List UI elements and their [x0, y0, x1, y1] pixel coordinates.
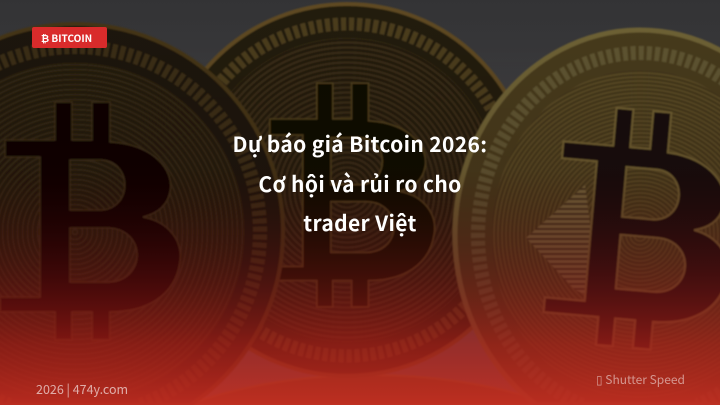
left coin	[0, 24, 283, 405]
title	[233, 129, 487, 238]
middle coin	[161, 4, 533, 376]
category badge	[32, 27, 107, 48]
bottom coin	[187, 375, 553, 405]
lit sunburst wedge	[526, 185, 600, 300]
photo credit: ▯ Shutter Speed	[596, 371, 685, 388]
category badge: ₿ BITCOIN	[41, 30, 92, 45]
title: Cơ hội và rủi ro cho	[258, 169, 462, 199]
right coin	[455, 30, 720, 405]
title: Dự báo giá Bitcoin 2026:	[233, 129, 487, 159]
title: trader Việt	[303, 208, 417, 238]
footer: date and site: 2026 | 474y.com	[36, 379, 128, 398]
